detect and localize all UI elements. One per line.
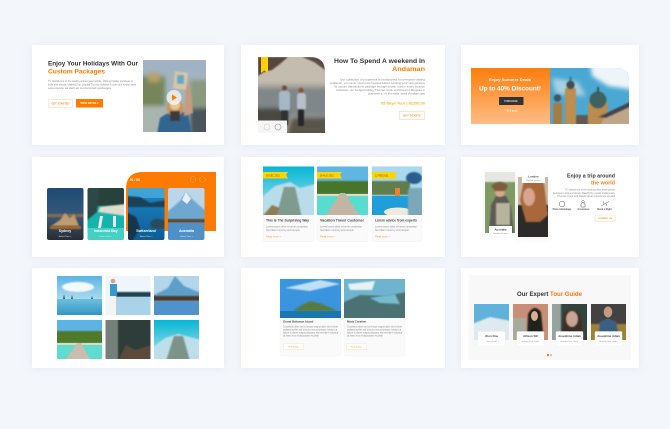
panel: trip around the world slide — [461, 157, 639, 257]
blog card: surprising way: Read more > — [266, 234, 282, 238]
carousel dots — [547, 354, 552, 356]
tag ribbon: 05 DEC 2021 — [266, 175, 281, 177]
detail card: island: Consetetur diam sed ut tempor magna dolor est sit amet — [283, 324, 338, 328]
location card: australia — [483, 170, 517, 236]
name card — [556, 332, 583, 346]
banner: discount offer: *T&Cs apply — [504, 110, 518, 112]
detail card: island: sadipscing elitr sed nonumy eirmod tempor invidunt ut — [283, 328, 337, 332]
gallery photo: woman by the sea — [106, 276, 150, 315]
body text: TC Islands one of the leading online travel portals — [565, 188, 616, 192]
gallery photo: rocky cave — [106, 320, 150, 359]
button: view details — [76, 99, 103, 108]
destination card: sydney: Select Tour > — [59, 235, 72, 238]
feature: assurance — [577, 200, 590, 211]
blog card: vacation travel: Vacation Travel Customer — [320, 218, 364, 222]
photo: couple overlooking city — [258, 57, 325, 133]
detail card: bay: at vero eos et accusam et justo — [347, 334, 384, 338]
panel: destinations slide — [32, 157, 224, 257]
panel: expert tour guide slide — [461, 268, 639, 368]
feature: price advantage: Price Advantage — [553, 208, 572, 211]
heading: custom packages: Enjoy Your Holidays With Our — [48, 60, 138, 68]
panel: blog cards slide — [241, 157, 445, 257]
button: read details: Full details — [351, 345, 363, 348]
body text: Andaman, you never need to be hassled before booking your next getaway — [330, 81, 426, 85]
label card: Australia — [495, 228, 507, 232]
destination card: indonesia: Indonesia Bay — [94, 229, 118, 233]
banner: discount offer — [471, 68, 550, 124]
location card: london — [516, 173, 550, 237]
panel: destination details slide — [241, 268, 445, 368]
name card: Josephine Adam — [558, 334, 581, 338]
destination card: switzerland — [128, 188, 164, 240]
tag ribbon: 12 FEB 2021 — [375, 175, 389, 177]
body text — [48, 79, 136, 90]
destination card: sydney — [47, 188, 84, 240]
blog card: advice from experts: Sed diam nonumy erat tempor — [375, 228, 409, 232]
banner: discount offer: Enjoy Summer Deals — [489, 78, 531, 82]
heading: trip around the world: Enjoy a trip around — [567, 174, 615, 180]
photo: traveller with map — [143, 60, 206, 132]
icon: play button — [166, 90, 182, 105]
button: contact us: CONTACT US — [598, 217, 613, 220]
blog card: vacation travel: Lorem ipsum dolor sit amet consetetur — [320, 224, 362, 228]
tour duration and price: 05 Days Tour | $1250.00 — [381, 102, 425, 106]
blog card: surprising way: Lorem ipsum dolor sit amet consetetur — [266, 224, 308, 228]
label card: Explore the tour — [493, 232, 508, 235]
blog card: advice from experts — [370, 166, 424, 242]
destination card: sydney: Sydney — [59, 229, 71, 233]
blog card: vacation travel: Read more > — [320, 234, 336, 238]
button: read details: Full details — [288, 345, 300, 348]
button: buy tickets: BUY TICKETS — [403, 114, 421, 118]
heading: how to spend a weekend: Andaman — [392, 66, 425, 73]
detail card: bay: sadipscing elitr sed nonumy eirmod tempor invidunt ut — [347, 328, 401, 332]
detail card: bay: Many Creation — [347, 320, 367, 324]
name card: Tour Guide — [486, 340, 497, 343]
heading: custom packages — [48, 60, 138, 76]
tag ribbon: 08 AUG 2021 — [320, 174, 335, 177]
detail card: bay — [342, 279, 407, 356]
heading: expert tour guide: Our Expert Tour Guide — [517, 292, 583, 298]
detail card: bay: labore et dolore magna aliquyam erat sed diam voluptua — [347, 330, 402, 334]
destination card: australia: Select Tour > — [180, 235, 194, 238]
orange backdrop — [126, 172, 216, 231]
button: purchase: PURCHASE — [504, 100, 518, 103]
photo: baroque church — [550, 68, 629, 124]
body text: for secure transactions package through known trust in every location — [334, 84, 426, 88]
inner grey panel — [469, 275, 631, 360]
blog card: surprising way — [261, 166, 316, 242]
body text: partners in Kerala and Andaman — [368, 92, 426, 96]
feature: book a flight: Book a flight — [597, 208, 612, 211]
destination card: switzerland: Select Tour > — [140, 235, 153, 238]
label card — [489, 226, 512, 236]
name card — [517, 332, 544, 346]
button: view details: VIEW DETAILS — [80, 101, 99, 105]
name card: Holiday Tour Guide — [561, 340, 579, 343]
blog card: advice from experts: Lorem ipsum dolor sit amet consetetur — [375, 224, 417, 228]
gallery photo: boat and glacier — [154, 320, 199, 359]
gallery photo: mountain lake — [154, 276, 199, 315]
label card: London — [528, 174, 539, 178]
blog card: surprising way: This Is The Surprising Way — [266, 218, 310, 222]
button: get started: GET STARTED — [51, 102, 70, 106]
blog card: surprising way: Sed diam nonumy erat tempor — [266, 228, 300, 232]
name card: Holiday Tour Guide — [600, 340, 618, 343]
destination card: switzerland: Switzerland — [136, 229, 156, 233]
guide: josephine martin — [589, 304, 628, 346]
name card: Josephine Adam — [597, 334, 620, 338]
name card: Holiday Tour Guide — [522, 340, 540, 343]
body text: India and abroad. MakeMyTrip, popular Thomas holidays & tours and Kesari great — [48, 82, 136, 86]
destination card: australia: Australia — [179, 229, 194, 233]
detail card: island — [280, 279, 341, 356]
icon: slider arrows — [190, 177, 205, 182]
name card: Allison Sill — [523, 334, 538, 338]
detail card: bay: Consetetur diam sed ut tempor magna dolor est sit amet — [347, 324, 402, 328]
detail card: island: Grand Bahamas Island — [283, 320, 314, 324]
destination card: indonesia: Select Tour > — [99, 235, 113, 238]
blog card: advice from experts: Lorem advice from experts — [375, 218, 417, 222]
slider label: 01 / 05 — [130, 178, 140, 182]
name card — [478, 332, 505, 346]
body text: Thomas Cook and Kesari great experience as well — [557, 194, 615, 198]
body text: Our collection of properties is handpicked for personal visiting — [340, 78, 426, 82]
heading: trip around the world — [567, 174, 615, 186]
guide: josephine adam — [550, 302, 587, 346]
body text — [553, 188, 616, 198]
heading: how to spend a weekend: How To Spend A weekend In — [334, 58, 425, 65]
button: contact us — [595, 215, 615, 222]
feature: assurance: Assurance — [577, 208, 590, 211]
name card: Jhon Doe — [485, 334, 498, 338]
photo nav box — [258, 120, 287, 133]
panel: weekend in andaman slide — [241, 45, 445, 145]
heading: how to spend a weekend — [334, 58, 425, 73]
feature: book a flight — [597, 201, 612, 211]
body text: Andaman, our budget holiday, Thomas Cook and Kesari a Margosa in — [336, 88, 426, 92]
label card — [522, 173, 545, 183]
guide: john doe — [472, 304, 511, 346]
guide: allison sill — [511, 304, 548, 346]
heading: trip around the world: the world — [591, 180, 615, 186]
gallery photo: tropical jetty — [57, 320, 102, 359]
name card — [595, 332, 622, 346]
gallery photo: sailboats — [57, 276, 102, 315]
button: get started — [48, 100, 72, 108]
banner: discount offer: Up to 40% Discount! — [479, 86, 541, 92]
panel: custom packages slide — [32, 45, 224, 145]
detail card: island: at vero eos et accusam et justo — [283, 334, 320, 338]
destination card: australia — [166, 188, 206, 240]
blog card: vacation travel — [315, 166, 370, 242]
button: buy tickets — [400, 112, 424, 120]
heading: custom packages: Custom Packages — [48, 68, 105, 76]
destination card: indonesia — [88, 188, 124, 240]
icon: new ribbon — [261, 57, 268, 73]
blog card: advice from experts: Read more > — [375, 234, 391, 238]
panel: summer deals slide — [461, 45, 639, 145]
detail card: island: labore et dolore magna aliquyam erat sed diam voluptua — [283, 330, 338, 334]
panel: photo gallery slide — [32, 268, 224, 368]
label card: Explore the tour — [526, 179, 541, 182]
blog card: vacation travel: Sed diam nonumy erat tempor — [320, 228, 354, 232]
body text: packages to India and abroad. MakeMyTrip, popular holidays tours — [553, 191, 616, 195]
body text — [330, 78, 426, 96]
body text: TC Islands one of the leading online travel portals, offering holiday packages to — [48, 79, 134, 83]
body text: experience as well as customized packages. — [48, 86, 112, 90]
feature: price advantage — [553, 201, 572, 211]
